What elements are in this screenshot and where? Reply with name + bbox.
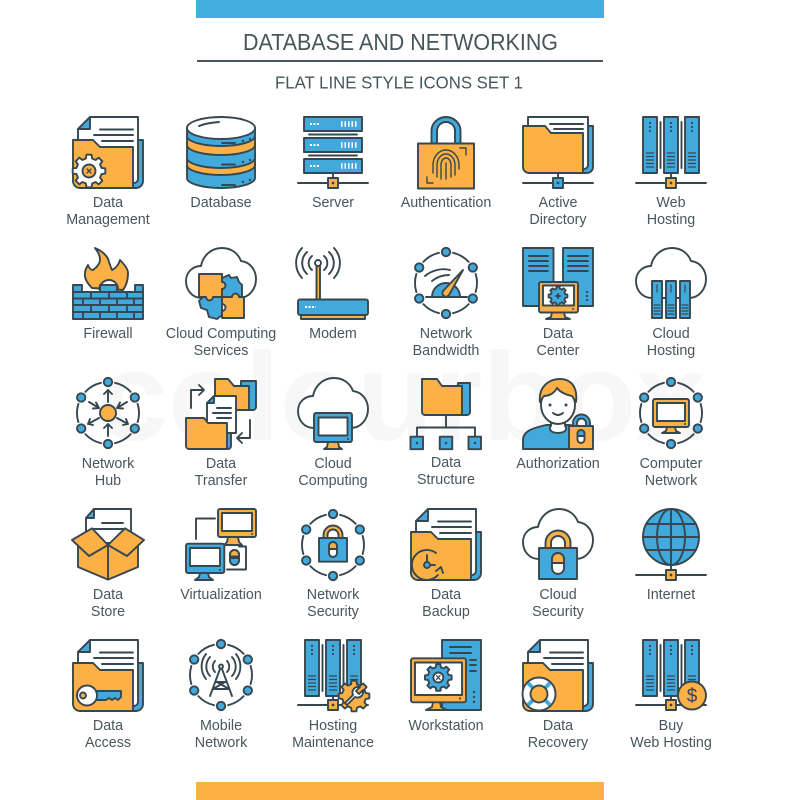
icon: hosting racks [636,117,706,188]
cell: Authorization [516,379,600,472]
icon: server rack [298,117,368,188]
icon: tower and monitor [411,640,481,710]
cell: Data Transfer [186,379,256,489]
icon: hub with arrows [77,378,139,448]
icon: folder hierarchy [410,379,481,449]
icon: fingerprint padlock [418,117,474,188]
label: Data [206,456,236,472]
cell: Cloud Security [523,509,593,620]
label: Web Hosting [630,735,712,751]
label: Buy [659,718,683,734]
icon: racks and monitor [523,248,593,319]
label: Cloud [314,456,352,472]
cell: Buy Web Hosting [630,640,712,751]
label: Access [85,735,131,751]
label: Workstation [408,718,484,734]
cell: Mobile Network [190,640,252,751]
label: Network [645,473,698,489]
watermark: colourbox [98,328,706,467]
icon: cloud with racks [636,248,706,318]
label: Data [543,718,573,734]
cell: Modem [296,248,368,342]
label: Hosting [647,343,695,359]
icon: speed gauge ring [415,248,477,318]
label: Mobile [200,718,242,734]
cell: Cloud Computing [298,378,368,489]
cell: Authentication [401,117,491,211]
label: Backup [422,604,470,620]
icon: racks with dollar coin: $ [687,686,698,707]
cell: Firewall [73,248,143,342]
cell: Cloud Hosting [636,248,706,359]
cell: Internet [636,509,706,603]
icon: two linked monitors [186,509,256,580]
icon: padlock ring [302,510,364,580]
label: Computer [640,456,702,472]
label: Firewall [83,326,133,342]
cell: Data Structure [410,379,481,488]
icon: open box with file [72,509,144,580]
label: Maintenance [292,735,374,751]
icon: cloud with padlock [523,509,593,579]
label: Web [656,195,686,211]
cell: Web Hosting [636,117,706,228]
icon: folders, file and arrows [186,379,256,449]
cell: Data Center [523,248,593,359]
label: Cloud [539,587,577,603]
cell: Data Access [73,640,143,751]
label: Cloud Computing [166,326,276,342]
label: Center [537,343,580,359]
label: Authorization [516,456,600,472]
label: Data [93,587,123,603]
title: DATABASE AND NETWORKING [243,29,558,55]
title rule [197,60,603,62]
label: Server [312,195,354,211]
label: Network [420,326,472,342]
icon: database stack [187,117,255,188]
subtitle: FLAT LINE STYLE ICONS SET 1 [275,72,523,92]
cell: Data Backup [411,509,481,620]
cell: Computer Network [640,378,703,489]
label: Modem [309,326,357,342]
cell: Data Management [66,117,150,228]
label: Security [532,604,585,620]
icon: racks with gear and wrench [298,640,369,711]
label: Authentication [401,195,491,211]
cell: Hosting Maintenance [292,640,374,751]
cell: Data Store [72,509,144,620]
label: Security [307,604,360,620]
cell: Network Security [302,510,364,620]
icon: networked folder [523,117,593,188]
label: Data [431,587,461,603]
icon: monitor ring [640,378,702,448]
label: Network [307,587,359,603]
label: Management [66,212,150,228]
label: Recovery [528,735,589,751]
label: Bandwidth [413,343,479,359]
icon: cloud with puzzle pieces [186,248,256,319]
label: Active [539,195,577,211]
label: Computing [298,473,368,489]
cell: Data Recovery [522,640,593,751]
label: Virtualization [180,587,262,603]
label: Cloud [652,326,690,342]
cell: Database [187,117,255,211]
cell: Server [298,117,368,211]
label: Network [195,735,248,751]
label: Data [93,718,123,734]
cell: Network Bandwidth [413,248,479,359]
label: Data [93,195,123,211]
label: Services [194,343,248,359]
label: Hosting [647,212,695,228]
label: Transfer [195,473,248,489]
label: Network [82,456,134,472]
icon: brick wall and flame [73,248,143,319]
label: Internet [647,587,695,603]
icon: cloud with monitor [298,378,368,449]
cell: Workstation [408,640,484,734]
cell: Virtualization [180,509,262,603]
label: Database [190,195,252,211]
cell: Cloud Computing Services [166,248,276,359]
top accent bar [196,0,604,18]
label: Hosting [309,718,357,734]
icon: globe on network [636,509,706,580]
icon: antenna ring [190,640,252,710]
icon: folder with gear [73,117,143,188]
label: Store [91,604,125,620]
label: Data [431,455,461,471]
cell: Network Hub [77,378,139,489]
icon: folder with lifebuoy [522,640,593,711]
label: Hub [95,473,121,489]
icon: wireless modem [296,248,368,319]
icon: folder with key [73,640,143,711]
label: Structure [417,472,475,488]
icon: person with padlock [523,379,593,449]
bottom accent bar [196,782,604,800]
label: Directory [529,212,587,228]
cell: Active Directory [523,117,593,228]
icon: folder with clock [411,509,481,580]
label: Data [543,326,573,342]
